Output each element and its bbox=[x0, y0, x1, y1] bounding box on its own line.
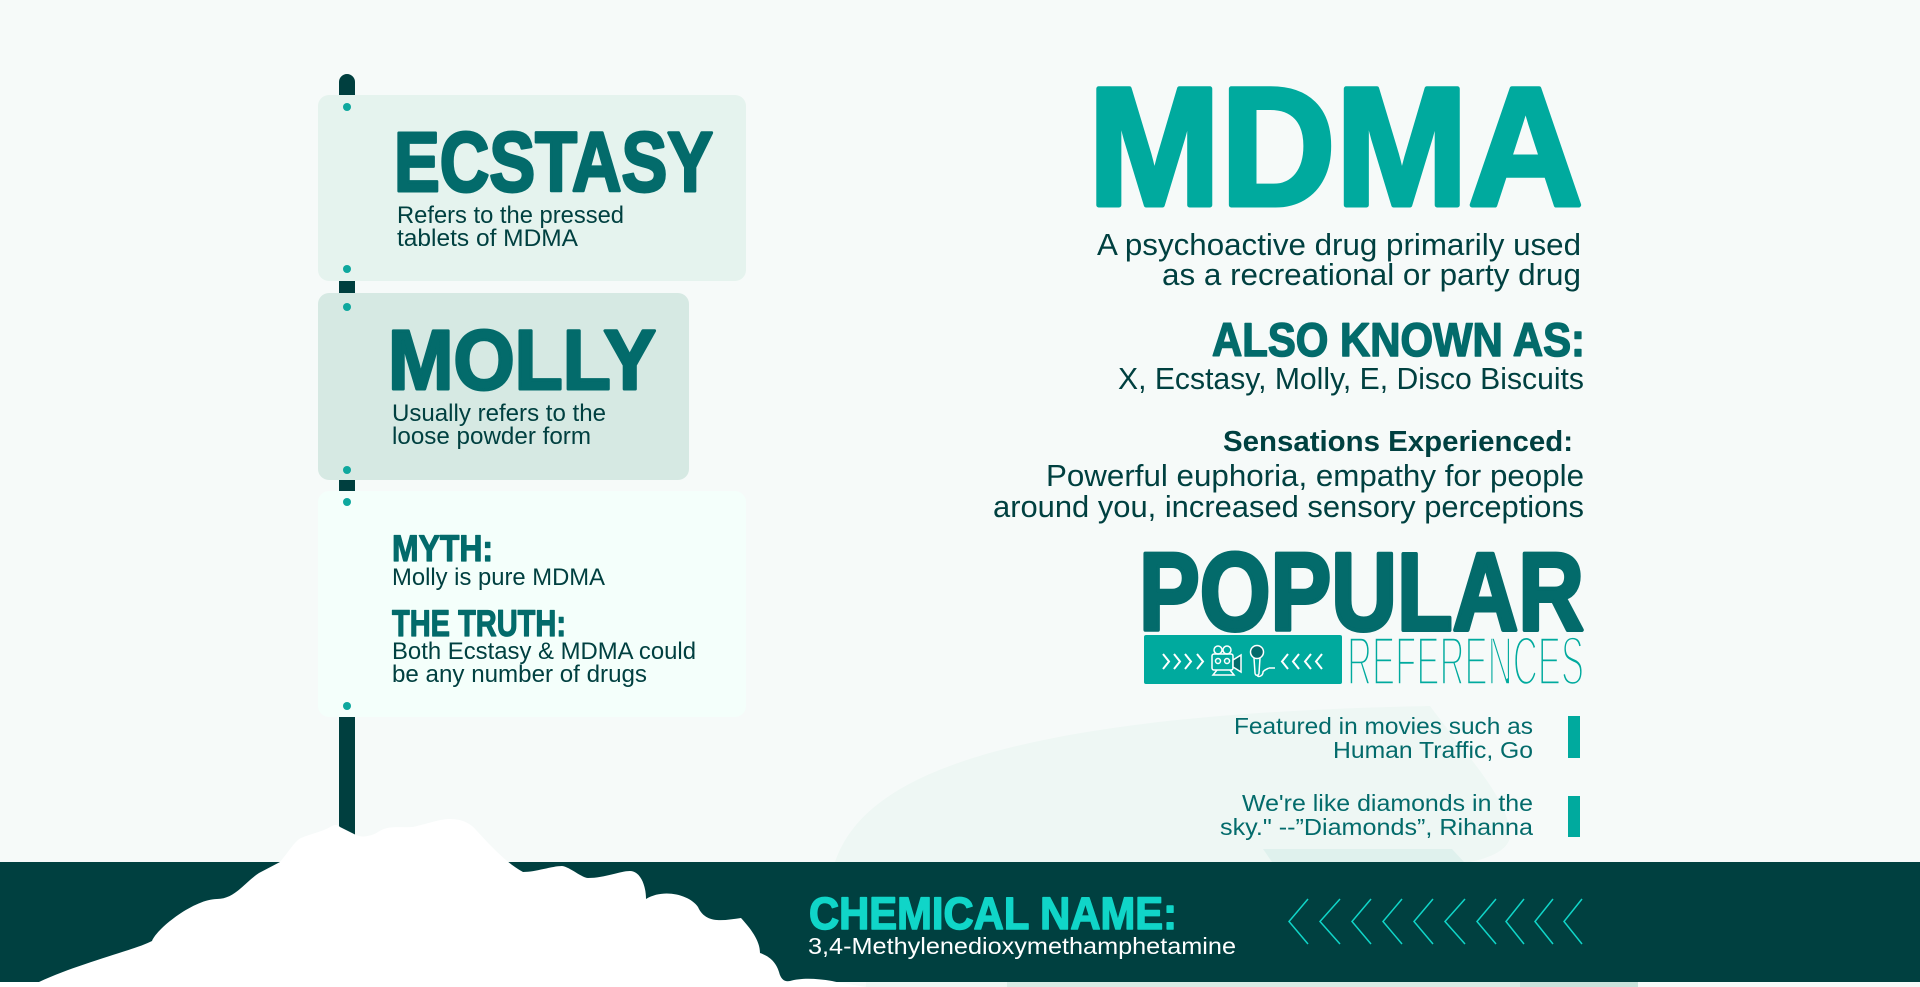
text: Molly description: Usually refers to the bbox=[392, 400, 606, 427]
text: music reference: We're like diamonds in the bbox=[1242, 790, 1533, 816]
text: MDMA description bbox=[1097, 227, 1581, 292]
text: sensations: Powerful euphoria, empathy for people bbox=[1046, 458, 1584, 493]
panel: Ecstasy sign bbox=[318, 95, 746, 281]
heading: The Truth: THE TRUTH: bbox=[392, 603, 566, 644]
text: movie references bbox=[1234, 713, 1533, 763]
background blob bbox=[835, 706, 1638, 987]
text: myth statement: Molly is pure MDMA bbox=[392, 564, 605, 591]
marker: movie references bbox=[1568, 716, 1580, 758]
title: MDMA: MDMA bbox=[1088, 52, 1583, 241]
heading: Myth: MYTH: bbox=[392, 528, 493, 569]
text: truth statement: Both Ecstasy & MDMA could bbox=[392, 638, 696, 665]
decorative chevrons bbox=[1289, 899, 1582, 944]
text: movie references: Featured in movies such as bbox=[1234, 713, 1533, 739]
powder mound bbox=[0, 819, 866, 987]
text: movie references: Human Traffic, Go bbox=[1333, 737, 1533, 763]
heading: Molly: MOLLY bbox=[388, 313, 656, 407]
footer band bbox=[0, 862, 1920, 982]
text: truth statement: be any number of drugs bbox=[392, 661, 647, 688]
text: Molly description: loose powder form bbox=[392, 423, 591, 450]
text: Ecstasy description: Refers to the pressed bbox=[397, 202, 624, 229]
heading: Sensations experienced: Sensations Experienced: bbox=[1223, 426, 1573, 458]
heading: Also known as: ALSO KNOWN AS: bbox=[1212, 313, 1585, 366]
text: Ecstasy description: tablets of MDMA bbox=[397, 225, 578, 252]
icon: left chevrons bbox=[1282, 654, 1322, 669]
icon: right chevrons bbox=[1163, 654, 1203, 669]
text: MDMA description: A psychoactive drug primarily used bbox=[1097, 227, 1581, 262]
heading: Popular: POPULAR bbox=[1139, 531, 1584, 654]
text: sensations: around you, increased sensory perceptions bbox=[993, 489, 1584, 524]
text: Ecstasy description bbox=[397, 202, 624, 252]
marker: music reference bbox=[1568, 796, 1580, 837]
text: sensations bbox=[993, 458, 1584, 524]
text: truth statement bbox=[392, 638, 696, 688]
signpost pole bbox=[339, 74, 355, 842]
panel: myth and truth sign bbox=[318, 491, 746, 717]
text: MDMA description: as a recreational or party drug bbox=[1162, 257, 1581, 292]
text: music reference: sky." --”Diamonds”, Rihanna bbox=[1220, 814, 1533, 840]
icon: movie camera bbox=[1212, 646, 1241, 675]
text: Molly description bbox=[392, 400, 606, 450]
text: street names: X, Ecstasy, Molly, E, Disco Biscuits bbox=[1118, 361, 1584, 396]
icon: microphone bbox=[1250, 646, 1275, 676]
heading: Chemical name: CHEMICAL NAME: bbox=[809, 888, 1177, 939]
text: chemical name: 3,4-Methylenedioxymethamphetamine bbox=[808, 933, 1236, 959]
panel: Molly sign bbox=[318, 293, 689, 480]
text: music reference bbox=[1220, 790, 1533, 840]
heading: Ecstasy: ECSTASY bbox=[394, 115, 713, 209]
text: REFERENCES bbox=[1347, 622, 1584, 700]
banner: film and music icons bbox=[1144, 635, 1342, 684]
